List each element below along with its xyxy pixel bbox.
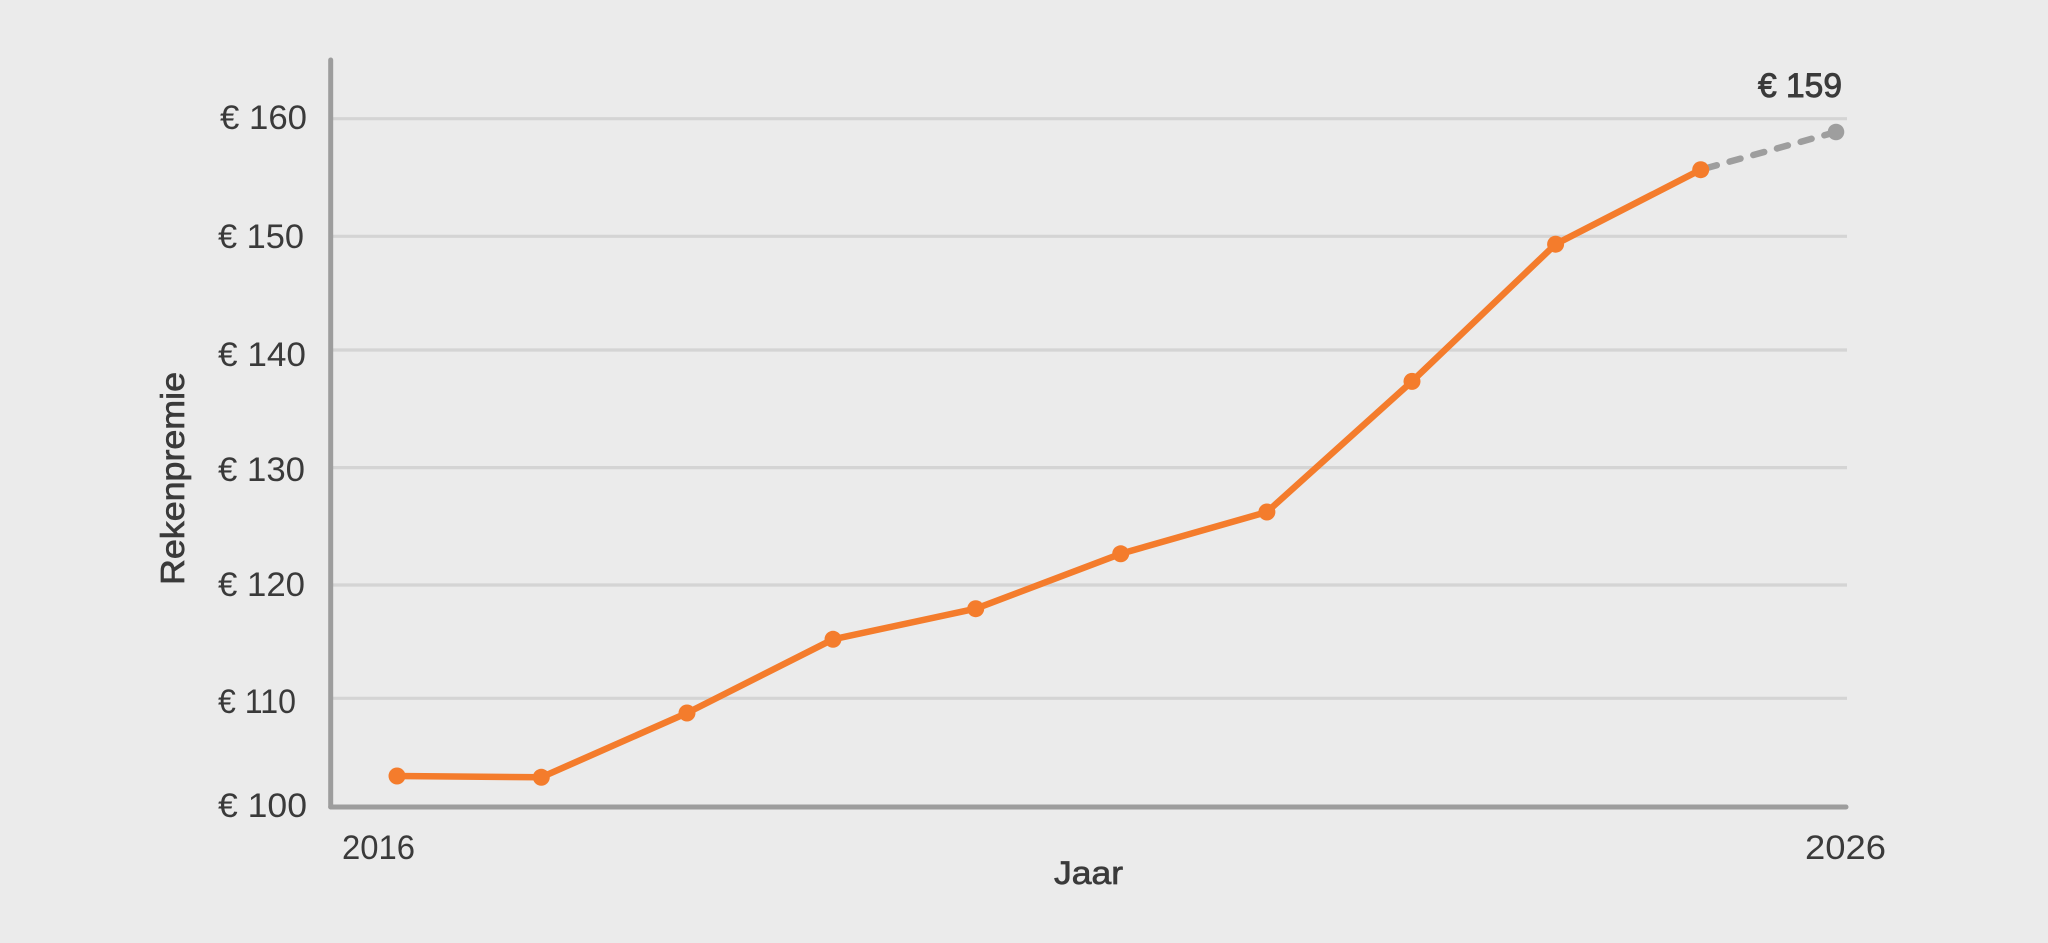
x axis title: Jaar [1054,855,1123,891]
y axis labels: € 100 [218,787,307,825]
y axis [328,60,333,807]
data points [388,161,1709,786]
y axis labels: € 140 [218,336,306,374]
y axis labels: € 160 [220,99,307,137]
value callout: € 159: € 159 [1758,67,1842,105]
orange data line [397,170,1701,777]
y axis labels [218,99,307,825]
y axis labels: € 110 [218,683,296,721]
y axis title: Rekenpremie [155,372,192,585]
y axis labels: € 120 [218,566,305,604]
x axis label: 2016: 2016 [342,829,415,867]
x axis label: 2026: 2026 [1805,829,1886,867]
y axis labels: € 150 [218,218,304,256]
dashed forecast line [1701,124,1844,170]
x axis [331,804,1846,810]
y axis labels: € 130 [218,451,305,489]
